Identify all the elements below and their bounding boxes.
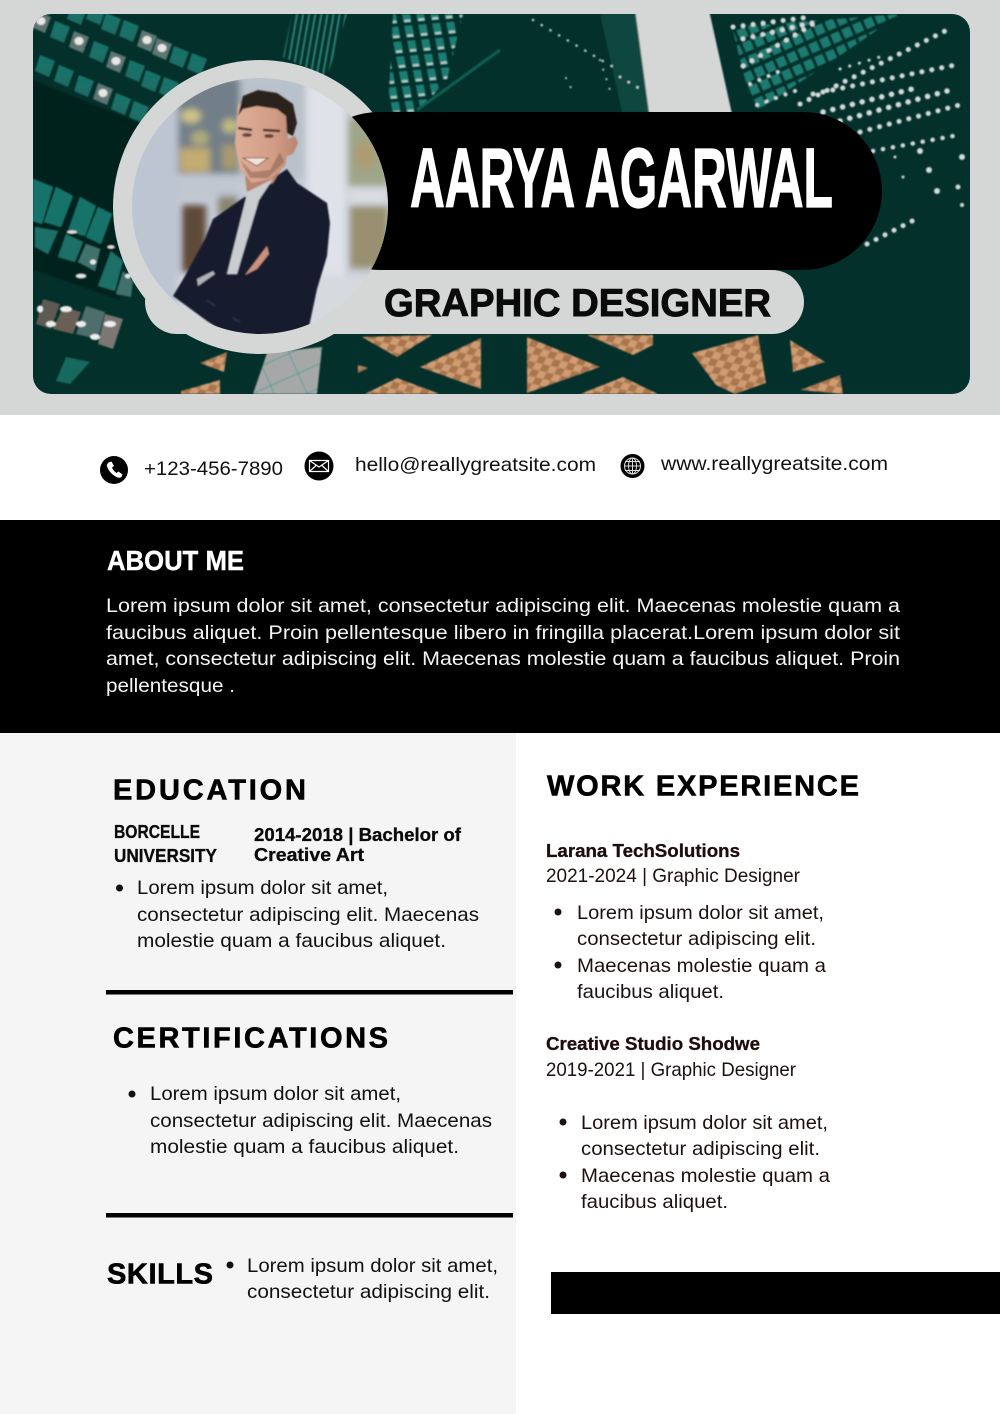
gap between buildings — [635, 10, 732, 114]
email address: hello@reallygreatsite.com — [355, 454, 596, 476]
education bullet list: consectetur adipiscing elit. Maecenas — [137, 904, 479, 926]
cuff — [197, 271, 215, 286]
heading: certifications: CERTIFICATIONS — [113, 1022, 388, 1054]
job 1: Larana TechSolutions — [546, 840, 740, 861]
education details: UNIVERSITY — [114, 845, 218, 866]
neck — [244, 170, 282, 192]
certifications bullet list: molestie quam a faucibus aliquet. — [150, 1136, 459, 1158]
job 2: Creative Studio Shodwe — [546, 1033, 760, 1054]
name banner — [300, 112, 882, 270]
job 2: Lorem ipsum dolor sit amet, — [581, 1112, 828, 1134]
right column: work experience — [546, 770, 859, 1213]
job 1 — [546, 840, 826, 1003]
job 2: faucibus aliquet. — [581, 1191, 728, 1213]
certifications bullet list — [128, 1083, 492, 1158]
header background — [0, 0, 1000, 415]
skills bullet list — [226, 1255, 498, 1303]
heading: about me: ABOUT ME — [107, 545, 244, 576]
about text: amet, consectetur adipiscing elit. Maecenas molestie quam a faucibus aliquet. Proin — [106, 648, 900, 670]
education details: 2014-2018 | Bachelor of — [254, 824, 462, 845]
top centre building — [283, 14, 347, 77]
photo frame ring — [113, 60, 804, 354]
subtitle: role: GRAPHIC DESIGNER — [384, 282, 771, 325]
left column panel — [0, 733, 516, 1414]
website address: www.reallygreatsite.com — [660, 453, 888, 475]
education bullet list: Lorem ipsum dolor sit amet, — [137, 877, 388, 899]
phone number: +123-456-7890 — [144, 458, 283, 480]
beard shade — [240, 152, 284, 178]
icon: phone — [100, 456, 128, 484]
job 1: Maecenas molestie quam a — [577, 955, 826, 977]
suit — [173, 169, 330, 338]
skills bullet list: consectetur adipiscing elit. — [247, 1281, 490, 1303]
education details: Creative Art — [254, 844, 364, 865]
education bullet list — [116, 877, 479, 952]
contact strip — [0, 415, 1000, 520]
top left windows — [101, 13, 121, 35]
top right windows — [732, 14, 900, 111]
lower left windows — [36, 299, 60, 329]
about text: faucibus aliquet. Proin pellentesque libero in fringilla placerat.Lorem ipsum dolor sit — [106, 622, 901, 644]
bottom copper panels — [181, 380, 220, 394]
heading: skills: SKILLS — [107, 1258, 213, 1290]
job 2: Maecenas molestie quam a — [581, 1165, 830, 1187]
skills bullet list: Lorem ipsum dolor sit amet, — [247, 1255, 498, 1277]
icon: globe — [620, 454, 644, 478]
black footer bar — [551, 1272, 1000, 1314]
education bullet list: molestie quam a faucibus aliquet. — [137, 930, 446, 952]
brows and eyes — [238, 128, 280, 131]
about text: pellentesque . — [106, 675, 235, 697]
portrait photo — [132, 78, 388, 338]
certifications bullet list: consectetur adipiscing elit. Maecenas — [150, 1110, 492, 1132]
job 1: Lorem ipsum dolor sit amet, — [577, 902, 824, 924]
banner: city building photo — [31, 3, 970, 394]
job 2: consectetur adipiscing elit. — [581, 1138, 820, 1160]
face — [235, 104, 298, 183]
hand — [245, 246, 269, 275]
certifications bullet list: Lorem ipsum dolor sit amet, — [150, 1083, 401, 1105]
collar and tie — [227, 179, 273, 274]
about text: Lorem ipsum dolor sit amet, consectetur adipiscing elit. Maecenas molestie quam a — [106, 595, 900, 617]
education details — [114, 821, 462, 866]
middle left windows — [33, 179, 53, 224]
icon: envelope — [304, 452, 334, 480]
man — [173, 90, 330, 338]
education details: BORCELLE — [114, 821, 200, 842]
panel: about me — [0, 520, 1000, 733]
smile — [243, 158, 268, 166]
job 2: 2019-2021 | Graphic Designer — [546, 1059, 796, 1081]
job 1: consectetur adipiscing elit. — [577, 928, 816, 950]
job 1: faucibus aliquet. — [577, 981, 724, 1003]
hair — [238, 90, 297, 136]
heading: education: EDUCATION — [113, 774, 306, 806]
job 1: 2021-2024 | Graphic Designer — [546, 865, 800, 887]
heading: work experience: WORK EXPERIENCE — [547, 770, 859, 802]
job 2 — [546, 1033, 830, 1213]
about text — [106, 595, 901, 697]
